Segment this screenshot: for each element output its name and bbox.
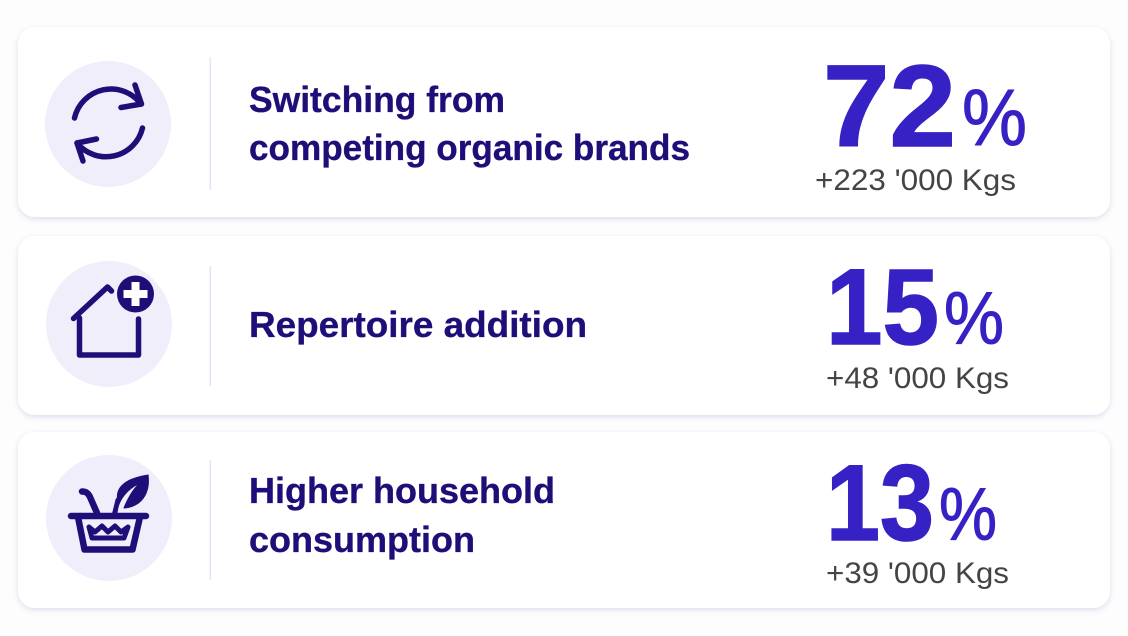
stat note: +39 '000 Kgs: +39 '000 Kgs	[826, 557, 1009, 590]
heading: higher household consumption: Higher household	[249, 470, 555, 511]
stat note: +48 '000 Kgs: +48 '000 Kgs	[826, 362, 1009, 395]
card background	[18, 236, 1110, 415]
card background	[18, 27, 1110, 217]
heading: switching from competing organic brands: Switching from	[249, 79, 505, 120]
panel: repertoire addition	[18, 236, 1110, 415]
stat note: +223 '000 Kgs: +223 '000 Kgs	[815, 164, 1016, 197]
stat: 13 percent: %	[939, 472, 997, 556]
card background	[18, 432, 1110, 608]
panel: switching from competing organic brands	[18, 27, 1110, 217]
heading: switching from competing organic brands: competing organic brands	[249, 127, 690, 168]
stat: 15 percent: 15	[826, 246, 939, 367]
heading: repertoire addition: Repertoire addition	[249, 304, 587, 345]
stat: 72 percent	[823, 41, 1027, 171]
heading: higher household consumption: consumption	[249, 519, 475, 560]
stat: 15 percent: %	[944, 276, 1004, 360]
panel: higher household consumption	[18, 432, 1110, 608]
stat: 13 percent: 13	[826, 442, 934, 563]
icon: basket with leaf	[46, 455, 172, 581]
leaf	[117, 474, 149, 508]
icon: house with plus	[46, 261, 172, 387]
stat: 72 percent: 72	[823, 41, 956, 171]
stat: 15 percent	[826, 246, 1004, 367]
stat: 72 percent: %	[962, 73, 1027, 162]
icon: circular arrows	[45, 61, 171, 187]
